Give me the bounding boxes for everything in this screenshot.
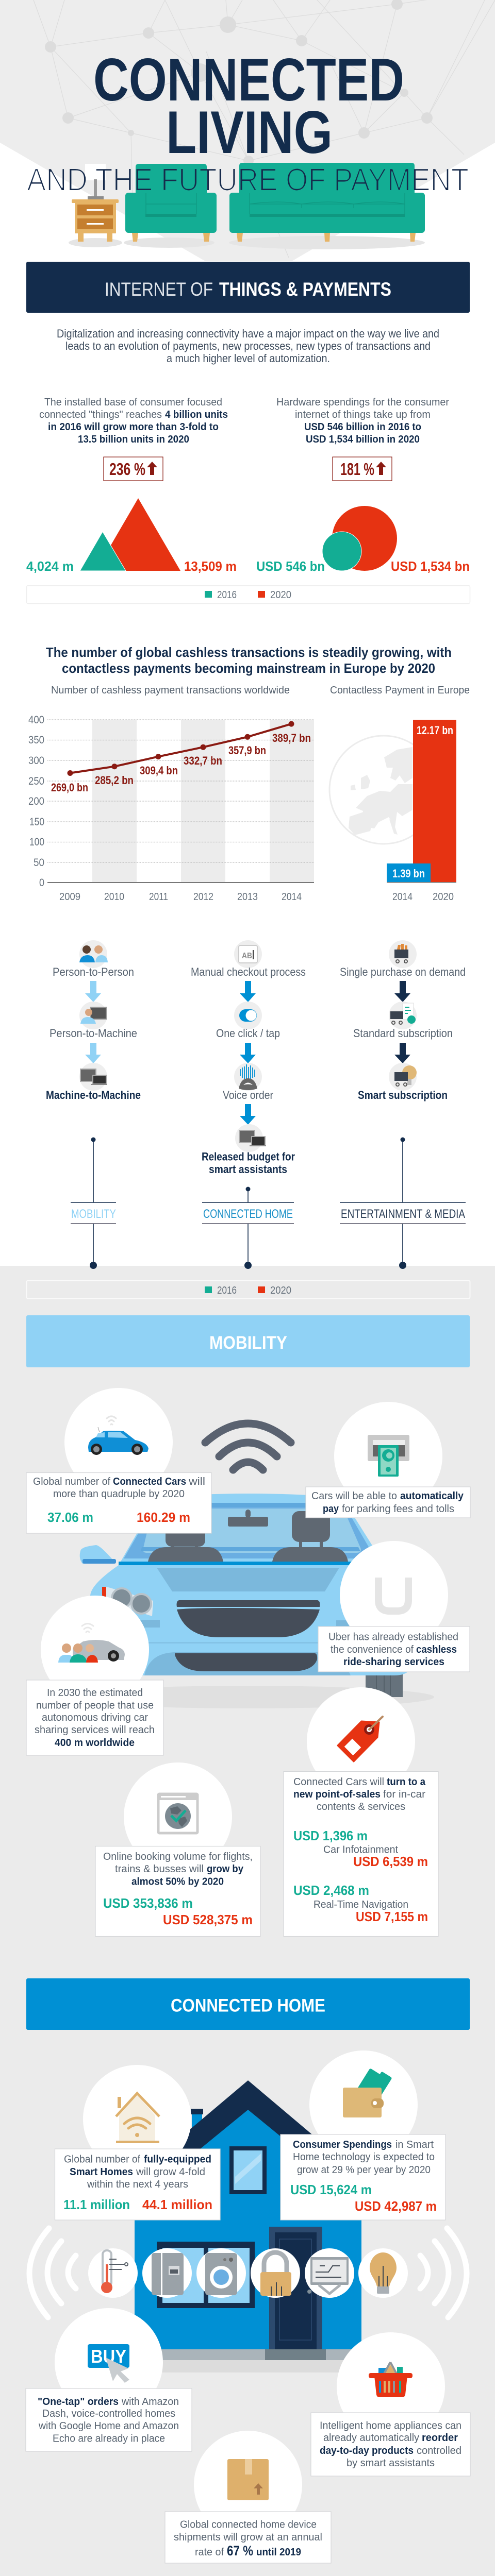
text block: hardware spendings: USD 546 billion in 2016 to bbox=[304, 421, 421, 433]
text box: online booking: almost 50% by 2020 bbox=[131, 1875, 224, 1888]
text box: online booking: trains & busses will bbox=[115, 1863, 204, 1875]
banner: mobility: MOBILITY bbox=[209, 1333, 287, 1353]
text box: one-tap orders bbox=[26, 2388, 192, 2451]
legend: 2020 bbox=[270, 589, 291, 601]
text box: consumer spendings: Home technology is expected to bbox=[293, 2151, 435, 2163]
text box: in-car point of sales: USD 1,396 m bbox=[293, 1828, 368, 1843]
text box: autonomous car sharing: autonomous driving car bbox=[42, 1711, 148, 1723]
legend bbox=[27, 585, 470, 604]
connector: mobility: MOBILITY bbox=[71, 1207, 116, 1221]
column: entertainment payment evolution bbox=[340, 940, 466, 1101]
line chart: cashless transactions worldwide: 0 bbox=[39, 877, 44, 889]
column: connected home payment evolution bbox=[191, 940, 306, 1176]
text block: installed base: 13.5 billion units in 2020 bbox=[78, 433, 189, 445]
text box: autonomous car sharing: number of people that use bbox=[36, 1699, 154, 1711]
text box: consumer spendings: in Smart bbox=[395, 2139, 434, 2150]
text box: consumer spendings bbox=[280, 2134, 446, 2220]
arrow bbox=[85, 981, 101, 1002]
intro text: a much higher level of automization. bbox=[167, 352, 330, 365]
text box: online booking: grow by bbox=[207, 1863, 244, 1875]
line chart: cashless transactions worldwide: 2010 bbox=[104, 891, 124, 903]
label: person to machine: Person-to-Machine bbox=[50, 1027, 137, 1040]
heading: cashless transactions: The number of global cashless transactions is steadily growing, with bbox=[46, 645, 452, 660]
text box: device shipments: shipments will grow at an annual bbox=[174, 2531, 322, 2543]
legend bbox=[27, 1281, 470, 1298]
label: single purchase: Single purchase on demand bbox=[340, 965, 466, 978]
text box: device shipments: until 2019 bbox=[256, 2546, 301, 2558]
text box: smart homes: 11.1 million bbox=[63, 2197, 130, 2212]
line chart: cashless transactions worldwide: 300 bbox=[28, 755, 44, 767]
icon circle: fridge bbox=[142, 2248, 192, 2298]
connector: connected home bbox=[202, 1187, 294, 1269]
line chart: cashless transactions worldwide: 400 bbox=[28, 714, 44, 726]
intro text: leads to an evolution of payments, new processes, new types of transactions and bbox=[65, 340, 431, 352]
heading: cashless transactions: contactless payments becoming mainstream in Europe by 2020 bbox=[62, 660, 435, 676]
line chart: cashless transactions worldwide bbox=[28, 684, 314, 903]
text box: consumer spendings: Consumer Spendings bbox=[293, 2139, 392, 2150]
icon circle: automatic payment bbox=[334, 1402, 442, 1510]
title: LIVING bbox=[166, 98, 333, 166]
banner: internet of things and payments: INTERNET OF bbox=[105, 279, 213, 300]
hero background network bbox=[0, 0, 495, 261]
icon: machines bbox=[79, 1063, 107, 1091]
label: machine to machine: Machine-to-Machine bbox=[46, 1089, 141, 1101]
illustration: house bbox=[125, 2080, 371, 2372]
text box: in-car point of sales: USD 2,468 m bbox=[293, 1883, 369, 1898]
callout: 181 percent: 181 % bbox=[340, 460, 374, 479]
text box: connected cars: will bbox=[188, 1476, 205, 1487]
text block: hardware spendings: Hardware spendings for the consumer bbox=[276, 396, 449, 408]
banner: connected home: CONNECTED HOME bbox=[171, 1996, 325, 2015]
icon circle: shopping basket bbox=[337, 2332, 445, 2441]
line chart: cashless transactions worldwide: 150 bbox=[29, 816, 44, 828]
banner: connected home bbox=[26, 1978, 470, 2030]
icon circle: washing machine bbox=[196, 2248, 246, 2298]
text box: in-car point of sales: Car Infotainment bbox=[323, 1843, 398, 1856]
text box: in-car point of sales: contents & services bbox=[317, 1801, 405, 1812]
text box: ride sharing: cashless bbox=[416, 1643, 457, 1655]
line chart: cashless transactions worldwide: 100 bbox=[29, 836, 44, 848]
text box: reorder products: Intelligent home appliances can bbox=[320, 2419, 461, 2432]
label: smart subscription: Smart subscription bbox=[358, 1089, 448, 1101]
chart: circles hardware spendings: USD 546 bn bbox=[256, 558, 325, 574]
text box: in-car point of sales: Connected Cars will bbox=[293, 1776, 384, 1788]
bar chart: contactless payment in Europe: 2020 bbox=[433, 891, 454, 903]
connector: connected home: CONNECTED HOME bbox=[203, 1207, 293, 1221]
text box: device shipments: rate of bbox=[195, 2546, 224, 2558]
icon circle: ride sharing bbox=[340, 1541, 448, 1649]
intro text bbox=[57, 327, 439, 365]
line chart: cashless transactions worldwide: Number of cashless payment transactions worldwide bbox=[51, 684, 290, 696]
text box: smart homes: 44.1 million bbox=[142, 2197, 212, 2212]
icon: machines bbox=[235, 1124, 266, 1152]
text box: ride sharing: the convenience of bbox=[331, 1643, 414, 1655]
legend: 2016 bbox=[217, 1285, 237, 1296]
line chart: cashless transactions worldwide: 389,7 bn bbox=[272, 732, 311, 744]
text box: device shipments bbox=[165, 2512, 331, 2563]
title bbox=[27, 46, 469, 198]
text box: one-tap orders: Echo are already in place bbox=[53, 2433, 165, 2444]
text block: hardware spendings: USD 1,534 billion in 2020 bbox=[306, 433, 420, 445]
arrow bbox=[240, 981, 256, 1002]
column: mobility payment evolution bbox=[46, 940, 141, 1101]
icon circle: thermometer bbox=[88, 2248, 138, 2298]
banner: mobility bbox=[26, 1315, 470, 1367]
title: CONNECTED bbox=[93, 46, 404, 113]
text box: automatic payment: Cars will be able to bbox=[311, 1490, 397, 1502]
text box: ride sharing: Uber has already established bbox=[328, 1631, 458, 1642]
line chart: cashless transactions worldwide: 350 bbox=[28, 734, 44, 746]
icon circle: connected car bbox=[64, 1388, 173, 1496]
label: one click: One click / tap bbox=[216, 1027, 280, 1040]
text box: ride sharing bbox=[318, 1626, 470, 1672]
connector: entertainment and media: ENTERTAINMENT & MEDIA bbox=[341, 1207, 465, 1221]
connector: entertainment and media bbox=[340, 1138, 466, 1269]
text box: online booking: USD 528,375 m bbox=[163, 1912, 253, 1927]
icon circle: one-tap buy bbox=[55, 2308, 163, 2416]
icon circle: wallet bbox=[309, 2050, 418, 2159]
text block: installed base: The installed base of consumer focused bbox=[44, 396, 222, 408]
line chart: cashless transactions worldwide: 269,0 bn bbox=[51, 781, 88, 794]
text box: one-tap orders: with Amazon bbox=[121, 2396, 179, 2408]
text box: connected cars: Global number of bbox=[33, 1476, 110, 1487]
text box: connected cars: more than quadruple by 2020 bbox=[53, 1488, 185, 1500]
bar chart: contactless payment in Europe: 1.39 bn bbox=[392, 867, 425, 880]
arrow bbox=[85, 1043, 101, 1063]
text box: online booking: Online booking volume for flights, bbox=[103, 1851, 253, 1862]
line chart: cashless transactions worldwide: 2014 bbox=[282, 891, 302, 903]
banner: internet of things and payments bbox=[26, 262, 470, 313]
text box: in-car point of sales: Real-Time Navigation bbox=[314, 1899, 408, 1910]
text box: one-tap orders: Dash, voice-controlled homes bbox=[42, 2408, 175, 2419]
text box: smart homes: will grow 4-fold bbox=[136, 2166, 205, 2178]
text box: reorder products: controlled bbox=[417, 2445, 461, 2456]
line chart: cashless transactions worldwide: 2012 bbox=[193, 891, 213, 903]
text block: installed base: in 2016 will grow more than 3-fold to bbox=[48, 421, 219, 433]
label: released budget: Released budget for bbox=[202, 1150, 295, 1163]
chart: triangles connected things bbox=[26, 498, 237, 574]
signal waves bbox=[29, 2228, 467, 2317]
chart: triangles connected things: 4,024 m bbox=[26, 558, 74, 574]
text box: automatic payment bbox=[306, 1487, 470, 1518]
label: released budget: smart assistants bbox=[209, 1163, 287, 1176]
text box: automatic payment: automatically bbox=[400, 1490, 464, 1502]
bar chart: contactless payment in Europe: 12.17 bn bbox=[417, 724, 453, 737]
text box: reorder products: already automatically bbox=[323, 2432, 420, 2444]
text box: device shipments: 67 % bbox=[227, 2543, 253, 2558]
text block: installed base bbox=[39, 396, 228, 445]
icon circle: package bbox=[194, 2431, 302, 2539]
text box: in-car point of sales: for in-car bbox=[383, 1788, 425, 1800]
text box: smart homes: Smart Homes bbox=[70, 2166, 133, 2178]
text box: ride sharing: ride-sharing services bbox=[343, 1656, 444, 1668]
text box: in-car point of sales: turn to a bbox=[387, 1776, 426, 1788]
line chart: cashless transactions worldwide: 2013 bbox=[237, 891, 258, 903]
text box: one-tap orders: with Google Home and Amazon bbox=[38, 2420, 179, 2432]
text box: in-car point of sales: USD 6,539 m bbox=[353, 1854, 428, 1869]
text box: smart homes: fully-equipped bbox=[144, 2154, 211, 2165]
icon: people bbox=[79, 940, 108, 968]
icon: toggle bbox=[234, 1002, 262, 1029]
text box: smart homes bbox=[55, 2149, 220, 2220]
gray section background bbox=[0, 1266, 495, 1958]
text box: connected cars: 160.29 m bbox=[137, 1510, 190, 1525]
icon circle: one-tap buy: BUY bbox=[91, 2346, 126, 2367]
bar chart: contactless payment in Europe bbox=[329, 684, 470, 903]
text block: hardware spendings: internet of things take up from bbox=[295, 409, 431, 420]
text block: hardware spendings bbox=[276, 396, 449, 445]
line chart: cashless transactions worldwide: 357,9 bn bbox=[228, 744, 266, 757]
line chart: cashless transactions worldwide: 50 bbox=[34, 857, 44, 869]
icon: text input bbox=[234, 940, 262, 968]
legend: 2016 bbox=[217, 589, 237, 601]
arrow bbox=[240, 1104, 256, 1125]
chart: circles hardware spendings bbox=[256, 506, 470, 574]
label: released budget bbox=[202, 1150, 295, 1176]
illustration: car front bbox=[61, 1494, 434, 1708]
icon circle: smart bulb bbox=[358, 2248, 408, 2298]
callout: 236 percent bbox=[104, 457, 163, 481]
callout: 236 percent: 236 % bbox=[109, 460, 145, 479]
icon circle: online booking bbox=[124, 1762, 232, 1871]
bar chart: contactless payment in Europe: 2014 bbox=[392, 891, 412, 903]
text box: reorder products: day-to-day products bbox=[320, 2445, 414, 2456]
bar chart: contactless payment in Europe: Contactless Payment in Europe bbox=[330, 684, 470, 696]
text box: consumer spendings: USD 15,624 m bbox=[290, 2182, 372, 2197]
arrow bbox=[394, 1043, 410, 1063]
text box: autonomous car sharing bbox=[26, 1680, 163, 1755]
label: person to person: Person-to-Person bbox=[53, 965, 134, 978]
label: voice order: Voice order bbox=[223, 1089, 273, 1101]
line chart: cashless transactions worldwide: 250 bbox=[28, 775, 44, 787]
text box: reorder products: reorder bbox=[422, 2432, 458, 2444]
text box: smart homes: within the next 4 years bbox=[87, 2178, 188, 2190]
text box: connected cars: Connected Cars bbox=[113, 1476, 186, 1487]
chart: circles hardware spendings: USD 1,534 bn bbox=[391, 558, 470, 574]
text box: consumer spendings: USD 42,987 m bbox=[355, 2198, 437, 2214]
text box: device shipments: Global connected home device bbox=[180, 2518, 317, 2531]
icon circle: price tag bbox=[307, 1687, 415, 1795]
chart: triangles connected things: 13,509 m bbox=[184, 558, 237, 574]
line chart: cashless transactions worldwide: 332,7 bn bbox=[184, 754, 222, 767]
icon circle: autonomous car sharing bbox=[41, 1596, 149, 1704]
line chart: cashless transactions worldwide: 2011 bbox=[149, 891, 168, 903]
connector: mobility bbox=[71, 1138, 116, 1269]
icon: cart with list bbox=[389, 1002, 417, 1029]
line chart: cashless transactions worldwide: 2009 bbox=[59, 891, 80, 903]
intro text: Digitalization and increasing connectivity have a major impact on the way we live and bbox=[57, 327, 439, 340]
banner: internet of things and payments: THINGS & PAYMENTS bbox=[219, 279, 391, 300]
text box: consumer spendings: grow at 29 % per year by 2020 bbox=[297, 2164, 431, 2176]
icon circle: smart lock bbox=[251, 2248, 300, 2298]
line chart: cashless transactions worldwide: 285,2 bn bbox=[95, 774, 134, 787]
text box: in-car point of sales: new point-of-sales bbox=[293, 1788, 381, 1800]
text box: connected cars bbox=[26, 1472, 211, 1533]
text box: online booking bbox=[95, 1846, 260, 1936]
arrow bbox=[240, 1043, 256, 1063]
icon: text input: AB bbox=[242, 952, 252, 960]
text box: connected cars: 37.06 m bbox=[47, 1510, 93, 1525]
icon circle: smart home bbox=[83, 2065, 191, 2173]
legend: 2020 bbox=[270, 1285, 291, 1296]
icon: cart with bulb bbox=[389, 1063, 417, 1091]
line chart: cashless transactions worldwide: 309,4 bn bbox=[140, 764, 178, 777]
text box: automatic payment: for parking fees and tolls bbox=[342, 1503, 454, 1515]
gray section background bbox=[0, 1958, 495, 2576]
label: manual checkout: Manual checkout process bbox=[191, 965, 306, 978]
text box: autonomous car sharing: 400 m worldwide bbox=[55, 1737, 135, 1749]
callout: 181 percent bbox=[333, 457, 392, 481]
text box: online booking: USD 353,836 m bbox=[103, 1895, 193, 1911]
text box: reorder products bbox=[311, 2413, 470, 2476]
text box: one-tap orders: "One-tap" orders bbox=[38, 2396, 119, 2408]
text box: in-car point of sales bbox=[284, 1771, 438, 1936]
icon: person and machine bbox=[79, 1002, 107, 1029]
text box: autonomous car sharing: sharing services will reach bbox=[35, 1724, 155, 1736]
text block: installed base: connected "things" reaches bbox=[39, 409, 162, 420]
heading: cashless transactions bbox=[46, 645, 452, 676]
text box: autonomous car sharing: In 2030 the estimated bbox=[47, 1687, 143, 1699]
label: standard subscription: Standard subscription bbox=[353, 1027, 453, 1040]
text box: reorder products: by smart assistants bbox=[346, 2457, 435, 2469]
text box: in-car point of sales: USD 7,155 m bbox=[356, 1909, 428, 1924]
arrow bbox=[394, 981, 410, 1002]
icon: cart bbox=[389, 940, 417, 968]
text box: smart homes: Global number of bbox=[64, 2154, 140, 2165]
text box: automatic payment: pay bbox=[323, 1503, 339, 1515]
line chart: cashless transactions worldwide: 200 bbox=[28, 795, 44, 807]
text block: installed base: 4 billion units bbox=[165, 409, 228, 420]
icon: large wifi bbox=[205, 1423, 291, 1470]
icon circle: circuit board bbox=[305, 2248, 354, 2298]
icon: voice bbox=[234, 1063, 262, 1091]
furniture illustration bbox=[69, 163, 425, 249]
